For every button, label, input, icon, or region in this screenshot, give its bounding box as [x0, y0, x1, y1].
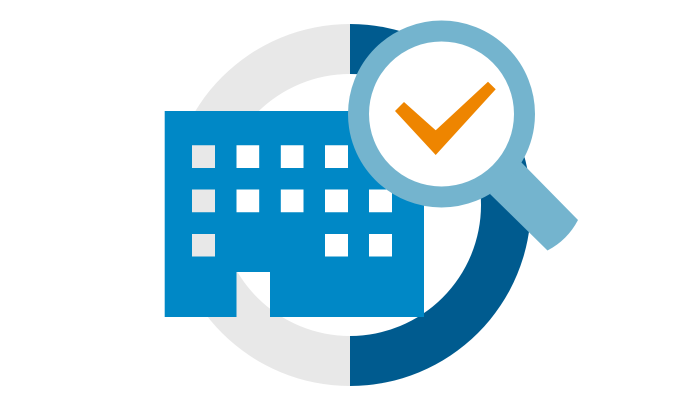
- magnifier lens: [358, 31, 524, 197]
- icon: magnifying glass: [358, 31, 578, 250]
- ring: grey left half: [169, 24, 350, 386]
- icon: office building with see-through windows and door: [165, 111, 424, 317]
- icon: orange check mark: [395, 82, 496, 155]
- ring: dark blue right half: [350, 24, 531, 386]
- magnifier handle: [490, 162, 578, 250]
